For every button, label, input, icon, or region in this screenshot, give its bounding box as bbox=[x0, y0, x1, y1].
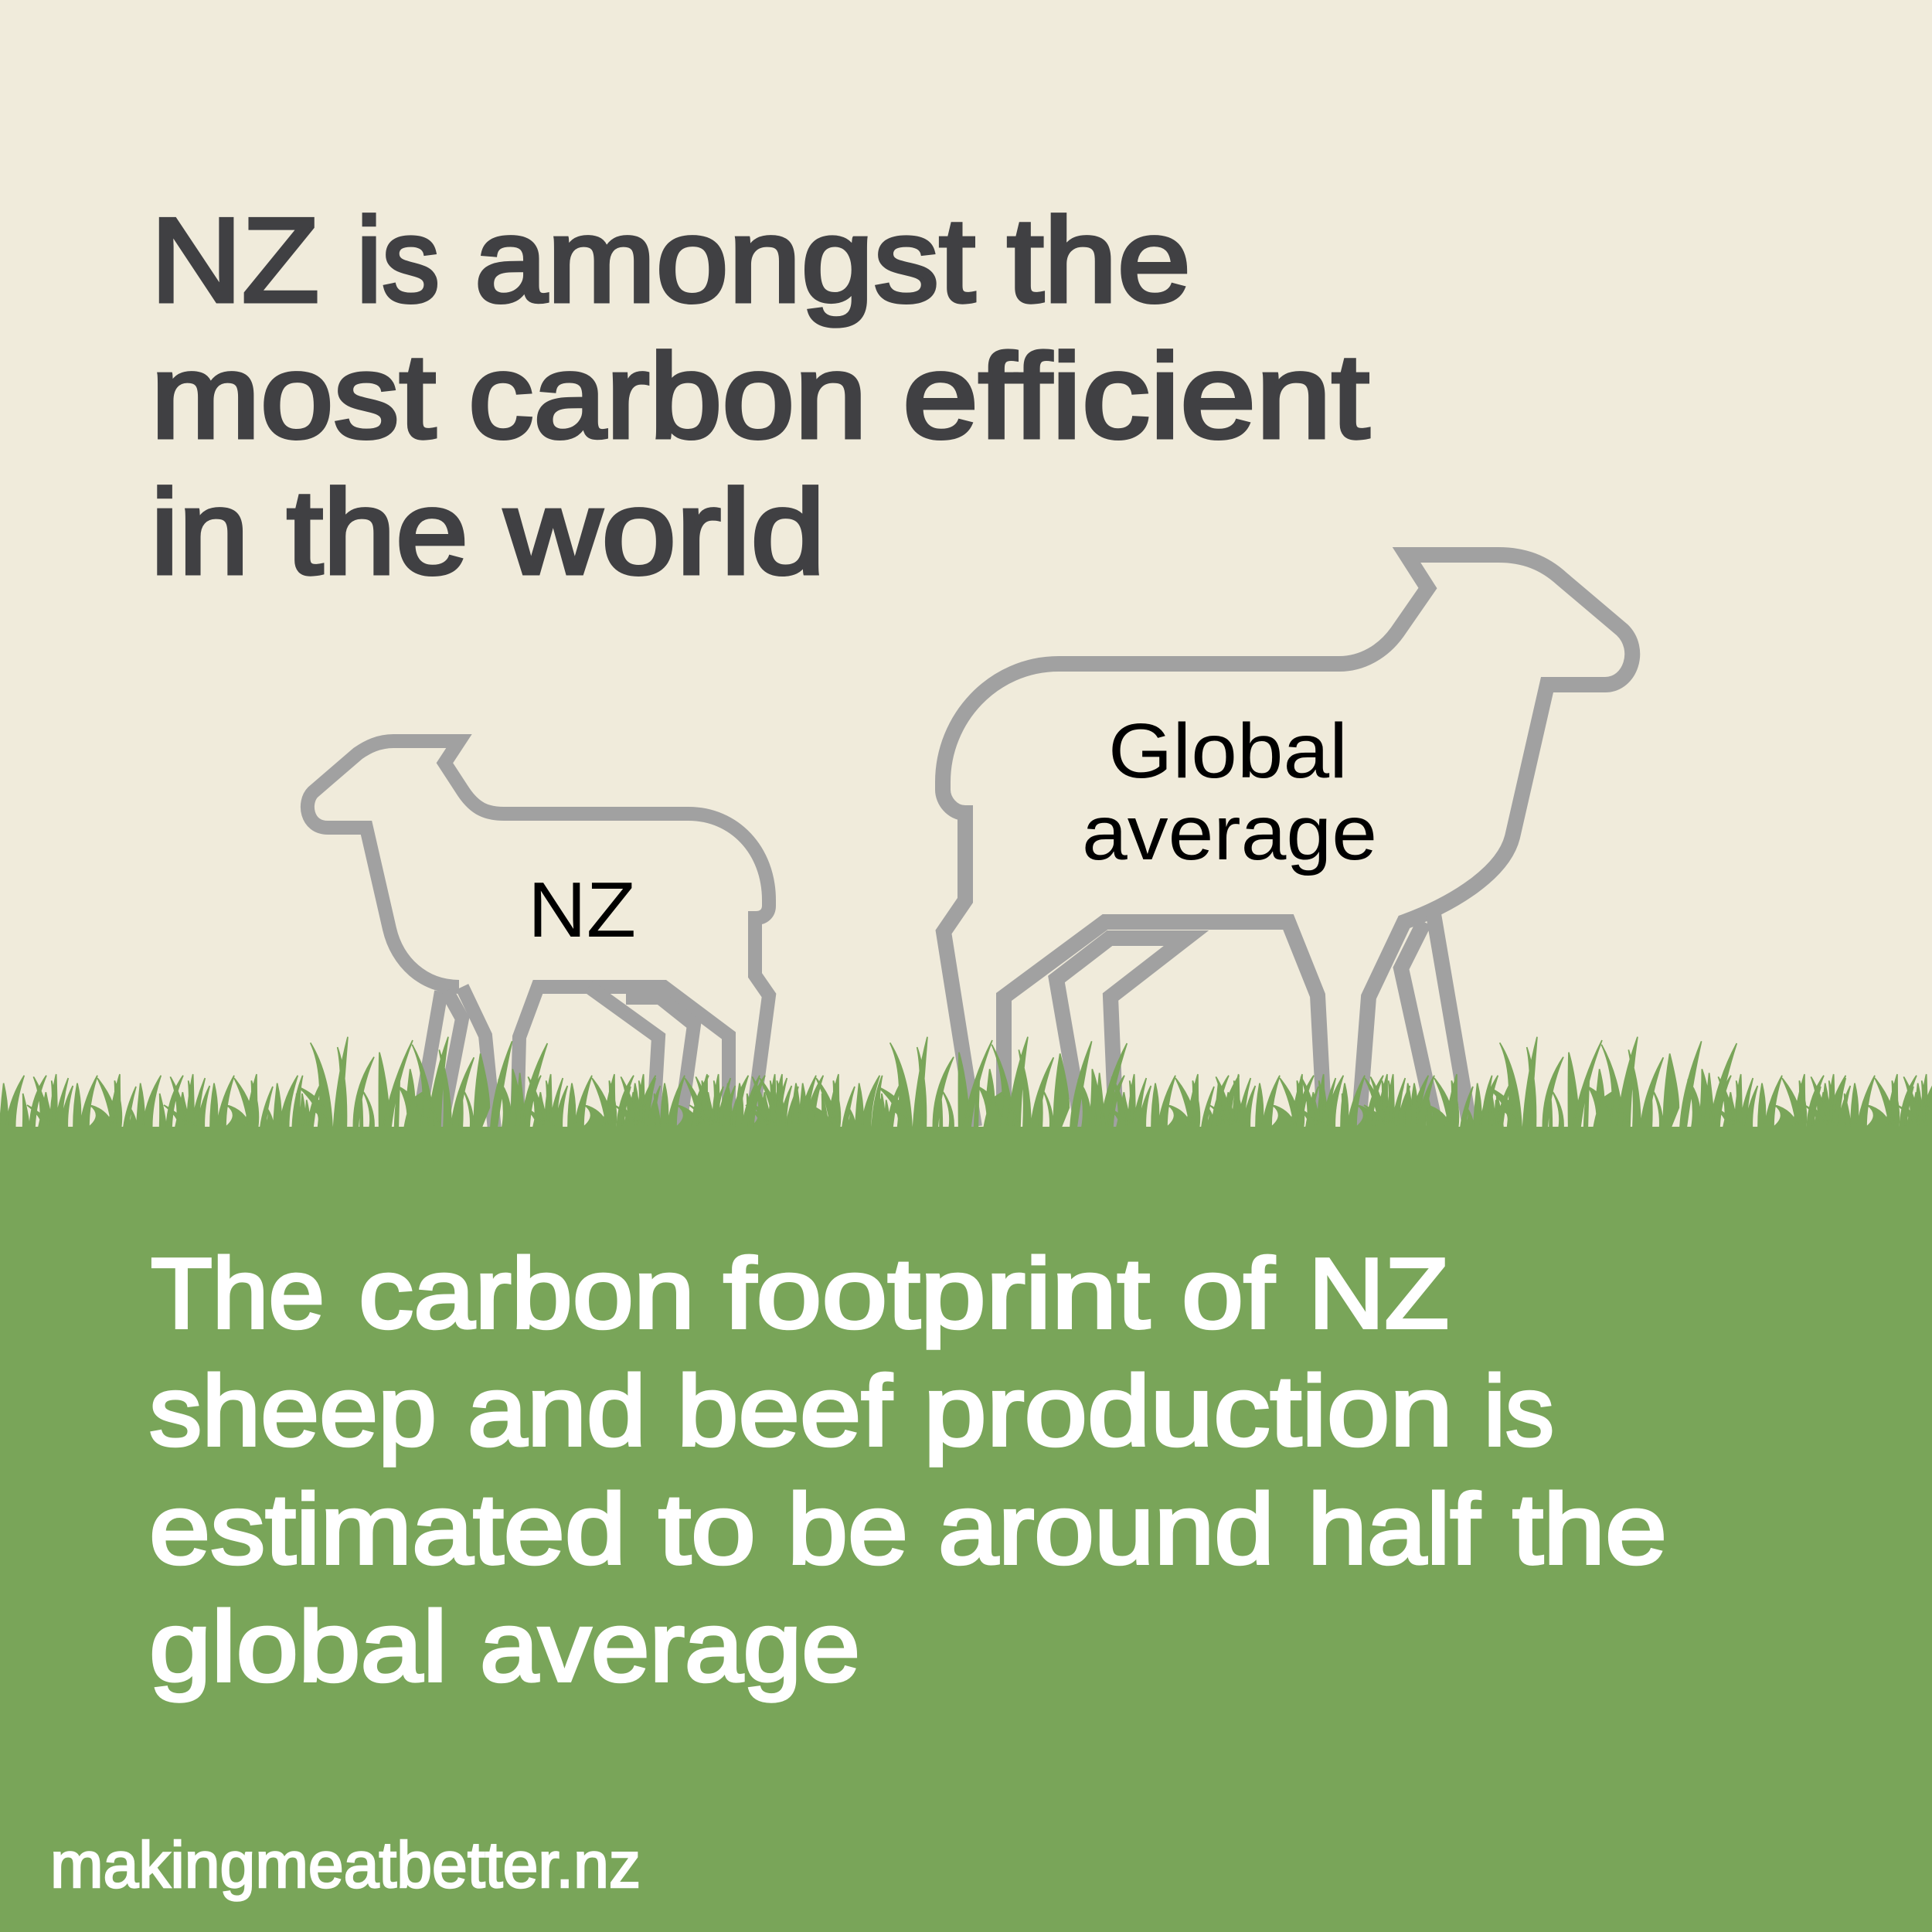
title: the bbox=[287, 465, 468, 599]
body text: around bbox=[938, 1474, 1274, 1585]
body text: be bbox=[787, 1474, 908, 1585]
label: global average bbox=[1082, 708, 1377, 876]
sheep: global average bbox=[943, 555, 1632, 1127]
body text: production bbox=[923, 1355, 1453, 1467]
body text: carbon bbox=[359, 1238, 695, 1349]
body text: The bbox=[151, 1238, 325, 1349]
title: efficient bbox=[903, 329, 1369, 463]
label: global average: Global bbox=[1108, 708, 1348, 794]
body text: footprint bbox=[723, 1238, 1150, 1349]
title: NZ bbox=[151, 193, 319, 327]
website url: makingmeatbetter.nz bbox=[50, 1828, 641, 1901]
body text: beef bbox=[677, 1355, 893, 1467]
body text: is bbox=[1484, 1355, 1554, 1467]
body text: sheep bbox=[149, 1355, 437, 1467]
body text: to bbox=[658, 1474, 756, 1585]
grass bbox=[0, 1037, 1932, 1127]
body text: half bbox=[1308, 1474, 1481, 1585]
green ground panel bbox=[0, 1127, 1932, 1932]
label: global average: average bbox=[1082, 790, 1377, 876]
body text: global bbox=[149, 1591, 447, 1702]
sheep: NZ bbox=[308, 741, 769, 1130]
title: carbon bbox=[468, 329, 867, 463]
body text bbox=[149, 1238, 1667, 1702]
body text: estimated bbox=[149, 1474, 626, 1585]
body text: average bbox=[480, 1591, 860, 1702]
body text: and bbox=[468, 1355, 646, 1467]
title: the bbox=[1007, 193, 1191, 327]
title: world bbox=[504, 465, 825, 599]
label: NZ: NZ bbox=[528, 867, 636, 954]
title: is bbox=[356, 193, 440, 327]
title bbox=[151, 193, 1369, 599]
body text: NZ bbox=[1308, 1238, 1449, 1349]
title: most bbox=[151, 329, 436, 463]
title: in bbox=[151, 465, 249, 599]
body text: the bbox=[1512, 1474, 1667, 1585]
title: amongst bbox=[474, 193, 975, 327]
body text: of bbox=[1182, 1238, 1275, 1349]
